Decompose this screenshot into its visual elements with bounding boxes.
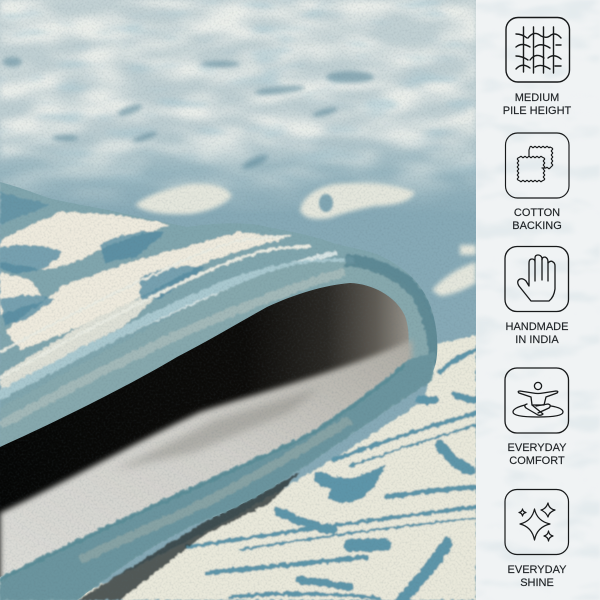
floor rug background (0, 0, 476, 600)
icon: everyday shine sparkles (505, 490, 568, 554)
pale floor motifs (135, 183, 476, 296)
label: medium pile height: PILE HEIGHT (503, 105, 571, 117)
rug underside: pale cotton backing (0, 340, 412, 590)
label: handmade in india: HANDMADE (506, 321, 568, 333)
label: cotton backing: BACKING (512, 220, 562, 232)
rolled rug body (0, 170, 445, 600)
icon: medium pile height (506, 18, 570, 82)
label: handmade in india (506, 321, 568, 346)
icon: cotton backing (506, 133, 569, 198)
rug lower bound edge (0, 352, 436, 600)
label: medium pile height: MEDIUM (515, 92, 559, 104)
flap front fold (202, 260, 349, 301)
icon: handmade hand (505, 246, 568, 312)
label: everyday comfort: COMFORT (509, 455, 565, 467)
label: everyday shine (508, 564, 566, 589)
rug pile grain (0, 0, 476, 600)
shadow beneath rug (77, 472, 300, 600)
label: cotton backing: COTTON (514, 207, 560, 219)
rug underside: dark hollow (0, 283, 409, 577)
icon: everyday comfort meditation (505, 368, 568, 433)
label: everyday shine: EVERYDAY (508, 564, 566, 576)
label: medium pile height (503, 92, 572, 117)
lower right floor pattern (70, 335, 476, 600)
label: everyday comfort (508, 442, 566, 467)
panel: feature sidebar (478, 2, 598, 559)
label: handmade in india: IN INDIA (515, 334, 559, 346)
photo: rolled rug corner (0, 0, 476, 600)
flap pattern: cream zones (0, 212, 285, 390)
label: cotton backing (512, 207, 562, 232)
label: everyday shine: SHINE (520, 577, 554, 589)
label: everyday comfort: EVERYDAY (508, 442, 566, 454)
